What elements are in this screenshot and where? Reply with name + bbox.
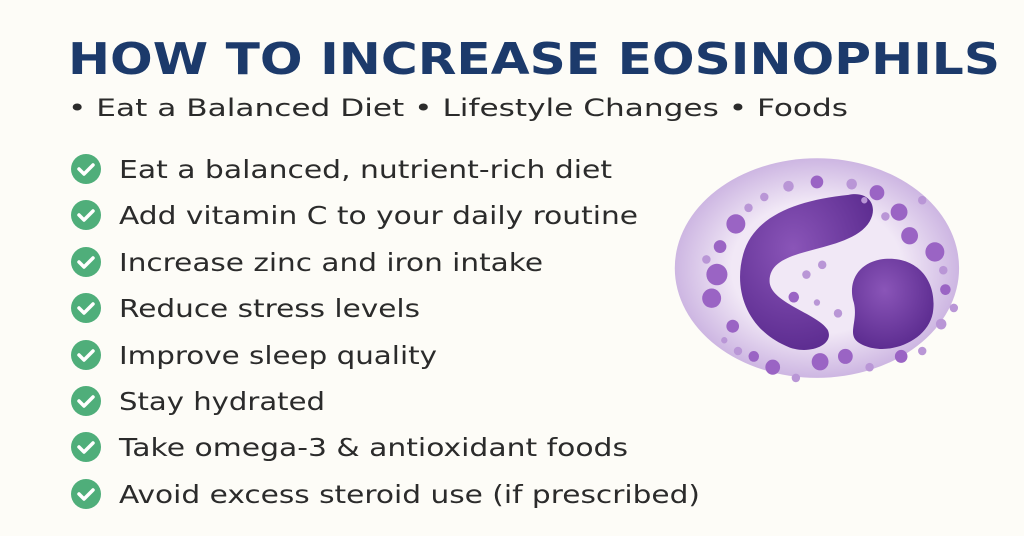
item 6: Stay hydrated bbox=[119, 387, 325, 416]
item 2: Add vitamin C to your daily routine bbox=[119, 201, 638, 230]
item 1: Eat a balanced, nutrient-rich diet bbox=[119, 155, 612, 184]
nucleus lobe 1 bbox=[740, 194, 873, 350]
title: HOW TO INCREASE EOSINOPHILS bbox=[68, 34, 1000, 85]
item 6 bbox=[71, 386, 325, 416]
item 5: Improve sleep quality bbox=[119, 341, 437, 370]
subtitle bullets: • Eat a Balanced Diet • Lifestyle Changes • Foods bbox=[68, 94, 848, 122]
item 8: Avoid excess steroid use (if prescribed) bbox=[119, 480, 700, 509]
item 7: Take omega-3 & antioxidant foods bbox=[118, 433, 628, 462]
nucleus lobe 2 bbox=[852, 259, 934, 349]
granules bbox=[702, 175, 951, 375]
item 3: Increase zinc and iron intake bbox=[119, 248, 543, 277]
item 4: Reduce stress levels bbox=[119, 294, 420, 323]
eosinophil cell illustration bbox=[674, 158, 960, 382]
checklist bbox=[71, 154, 700, 509]
